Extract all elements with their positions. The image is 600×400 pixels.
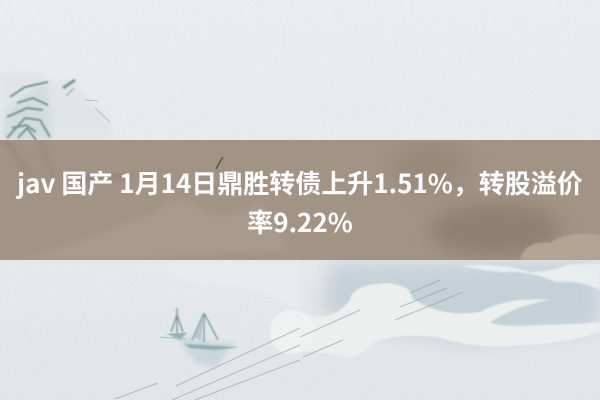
icon: distant mountain top left	[0, 72, 112, 140]
icon: cloud wash lower right	[160, 262, 600, 357]
icon: sailboats	[160, 308, 240, 368]
title: jav 国产 1月14日鼎胜转债上升1.51%，转股溢价率9.22%	[17, 164, 583, 240]
title band	[0, 140, 600, 260]
diagonal lines	[115, 280, 463, 400]
